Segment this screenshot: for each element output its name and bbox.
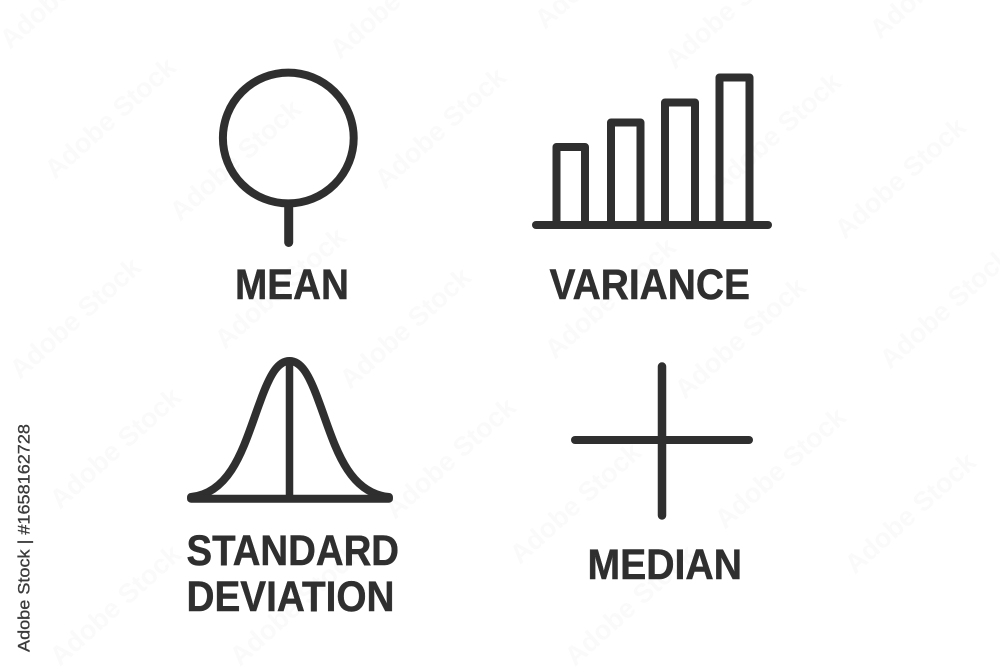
watermark pattern: Adobe Stock [209,221,352,354]
stock id caption: Adobe Stock | #1658162728 [14,424,34,652]
icon: variance bar chart [536,78,768,225]
watermark pattern: Adobe Stock [164,93,307,226]
watermark pattern: Adobe Stock [829,111,972,244]
watermark pattern: Adobe Stock [39,51,182,184]
watermark pattern: Adobe Stock [504,436,647,569]
icon: standard deviation bell curve [191,361,389,499]
label: mean: MEAN [235,261,349,309]
label: standard deviation [186,527,399,621]
watermark pattern: Adobe Stock [709,401,852,534]
watermark pattern: Adobe Stock [539,231,682,364]
watermark pattern: Adobe Stock [4,251,147,384]
watermark pattern: Adobe Stock [669,271,812,404]
watermark pattern: Adobe Stock [44,381,187,514]
label: median: MEDIAN [588,541,742,589]
watermark pattern: Adobe Stock [334,261,477,394]
watermark pattern: Adobe Stock [369,61,512,194]
label: variance: VARIANCE [550,261,750,309]
watermark pattern: Adobe Stock [704,66,847,199]
watermark pattern: Adobe Stock [839,446,982,579]
label: standard deviation: DEVIATION [186,573,394,621]
watermark pattern: Adobe Stock [379,391,522,524]
icon: mean [223,73,354,242]
label: standard deviation: STANDARD [186,527,399,575]
icon: median cross [575,366,749,516]
